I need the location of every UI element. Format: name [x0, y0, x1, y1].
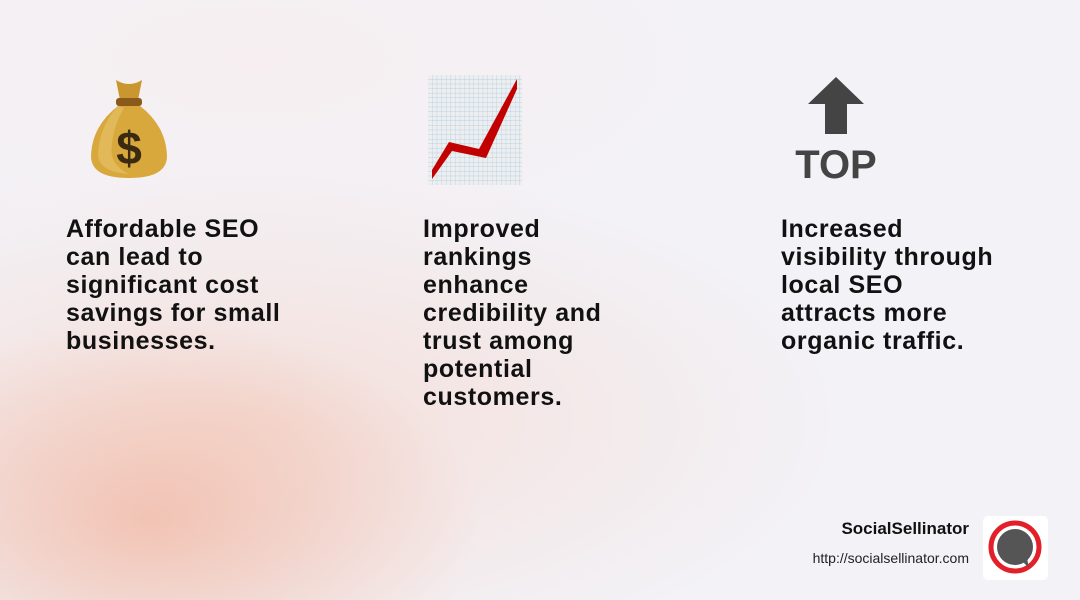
- icon: chart: [428, 75, 522, 185]
- text: column 2: Improved: [423, 215, 540, 243]
- text: column 3: [781, 215, 993, 355]
- text: column 1: significant cost: [66, 271, 259, 299]
- text: column 2: potential: [423, 355, 533, 383]
- text: column 3: local SEO: [781, 271, 903, 299]
- icon: top arrow: [795, 77, 877, 180]
- text: column 1: Affordable SEO: [66, 215, 259, 243]
- text: column 2: customers.: [423, 383, 562, 411]
- text: column 2: enhance: [423, 271, 529, 299]
- text: column 3: Increased: [781, 215, 903, 243]
- brand url: http://socialsellinator.com: [813, 550, 969, 566]
- text: column 3: attracts more: [781, 299, 947, 327]
- text: column 1: savings for small: [66, 299, 280, 327]
- text: column 3: visibility through: [781, 243, 993, 271]
- brand name: SocialSellinator: [841, 519, 969, 538]
- text: column 1: can lead to: [66, 243, 203, 271]
- text: column 2: [423, 215, 601, 411]
- logo: [983, 516, 1048, 580]
- text: column 2: trust among: [423, 327, 574, 355]
- icon: money bag: [91, 80, 167, 178]
- text: column 1: [66, 215, 280, 355]
- text: column 1: businesses.: [66, 327, 216, 355]
- icon: money bag: $: [116, 122, 142, 174]
- text: column 3: organic traffic.: [781, 327, 964, 355]
- text: column 2: credibility and: [423, 299, 601, 327]
- text: column 2: rankings: [423, 243, 532, 271]
